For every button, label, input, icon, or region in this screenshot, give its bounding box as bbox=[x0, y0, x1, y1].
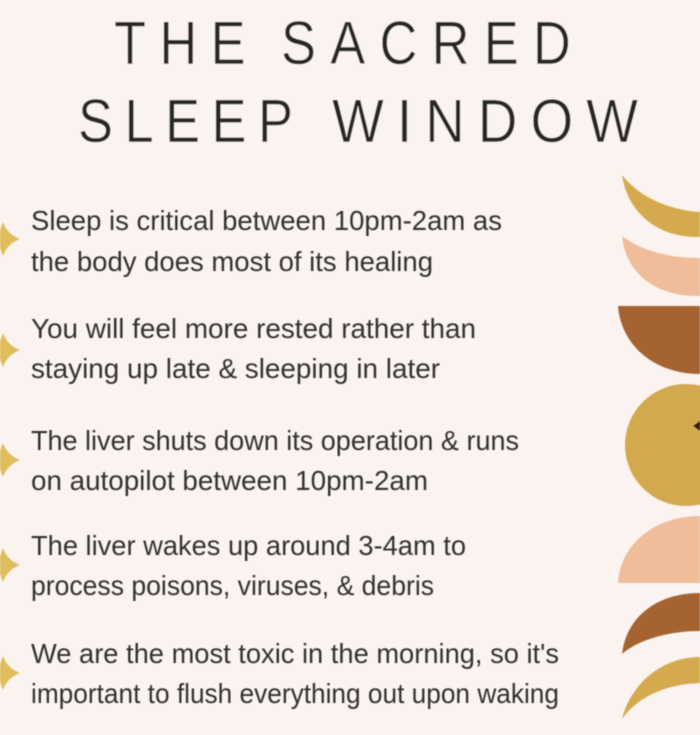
icon: small dark mark bbox=[693, 421, 700, 431]
moon: gold waning crescent bbox=[622, 175, 700, 237]
moon: brown half circle bbox=[618, 306, 700, 374]
moon phases bbox=[618, 175, 700, 719]
moon: peach half circle bbox=[618, 516, 700, 583]
text block: more rested: staying up late & sleeping in later bbox=[31, 353, 440, 384]
text block: liver wakes up: The liver wakes up around 3-4am to bbox=[31, 530, 466, 561]
text block: most toxic: We are the most toxic in the morning, so it's bbox=[31, 638, 559, 669]
title: SACRED bbox=[281, 9, 571, 78]
text block: more rested bbox=[31, 313, 476, 384]
icon: star bullets bbox=[0, 222, 20, 690]
title: THE bbox=[114, 9, 246, 78]
text block: liver shuts down bbox=[31, 425, 519, 496]
text block: liver wakes up: process poisons, viruses, & debris bbox=[31, 570, 434, 601]
text block: sleep is critical: Sleep is critical between 10pm-2am as bbox=[31, 205, 502, 236]
title: WINDOW bbox=[332, 87, 638, 156]
title: SLEEP bbox=[78, 87, 293, 156]
text block: liver shuts down: The liver shuts down its operation & runs bbox=[31, 425, 519, 456]
moon: peach crescent bbox=[622, 236, 700, 296]
moon: gold full circle bbox=[625, 384, 700, 506]
text block: most toxic bbox=[31, 638, 559, 709]
moon: gold crescent bbox=[622, 657, 700, 719]
title bbox=[78, 9, 638, 156]
text block: most toxic: important to flush everything out upon waking bbox=[31, 678, 559, 709]
moon: brown crescent bbox=[622, 593, 700, 654]
text block: sleep is critical: the body does most of its healing bbox=[31, 246, 433, 277]
text block: liver wakes up bbox=[31, 530, 466, 601]
text block: sleep is critical bbox=[31, 205, 502, 277]
text block: more rested: You will feel more rested rather than bbox=[31, 313, 476, 344]
text block: liver shuts down: on autopilot between 10pm-2am bbox=[31, 465, 428, 496]
